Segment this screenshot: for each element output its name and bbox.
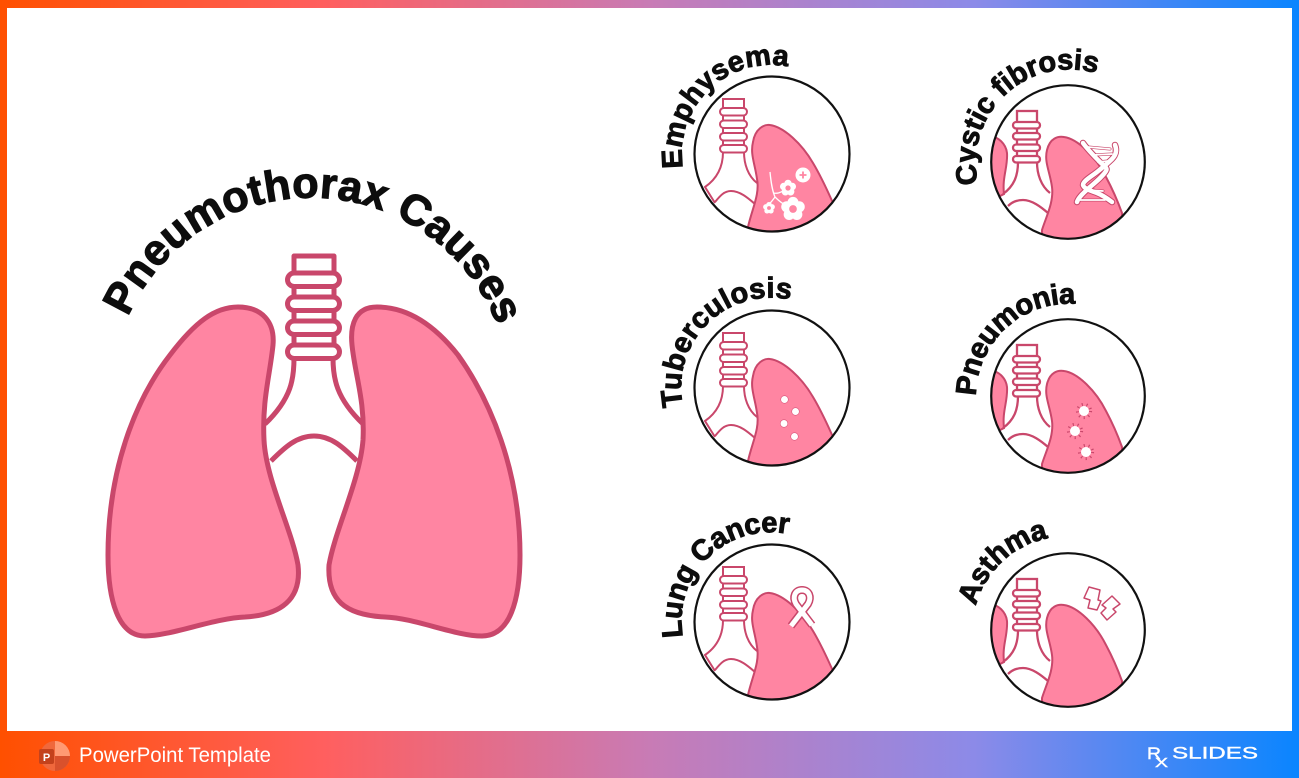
label: Tuberculosis [660, 276, 792, 409]
panel: asthma [959, 524, 1146, 708]
label: Cystic fibrosis [956, 48, 1098, 185]
main lungs illustration [108, 256, 520, 636]
footer: brand logo: X [1155, 755, 1168, 770]
left lung [108, 307, 298, 636]
label: Asthma [959, 524, 1049, 606]
label: Pneumonia [955, 283, 1076, 395]
trachea and bronchi [265, 256, 363, 461]
icon: white spots [780, 396, 799, 440]
footer: brand logo: SLIDES [1172, 744, 1258, 762]
panel: emphysema [661, 48, 851, 233]
icon: infection spots [1068, 404, 1092, 458]
icon: powerpoint logo: P [43, 752, 50, 764]
title: Pneumothorax Causes [102, 169, 516, 322]
panel: tuberculosis [660, 276, 851, 467]
icon: airway constriction marks [1084, 587, 1120, 620]
footer: brand logo: R [1147, 744, 1161, 763]
label: Lung Cancer [662, 516, 790, 638]
panel: lung cancer [662, 516, 851, 701]
icon: awareness ribbon [791, 590, 812, 626]
footer: powerpoint badge [39, 741, 271, 771]
icon: dna helix [1077, 143, 1116, 202]
footer: brand logo [1147, 744, 1258, 770]
panel: cystic fibrosis [956, 48, 1146, 240]
label: Emphysema [661, 48, 789, 168]
icon: branch with blossoms [763, 168, 810, 220]
icon: powerpoint logo [39, 741, 70, 771]
footer label: PowerPoint Template [79, 744, 271, 767]
panel: pneumonia [955, 283, 1146, 474]
right lung [329, 307, 520, 636]
